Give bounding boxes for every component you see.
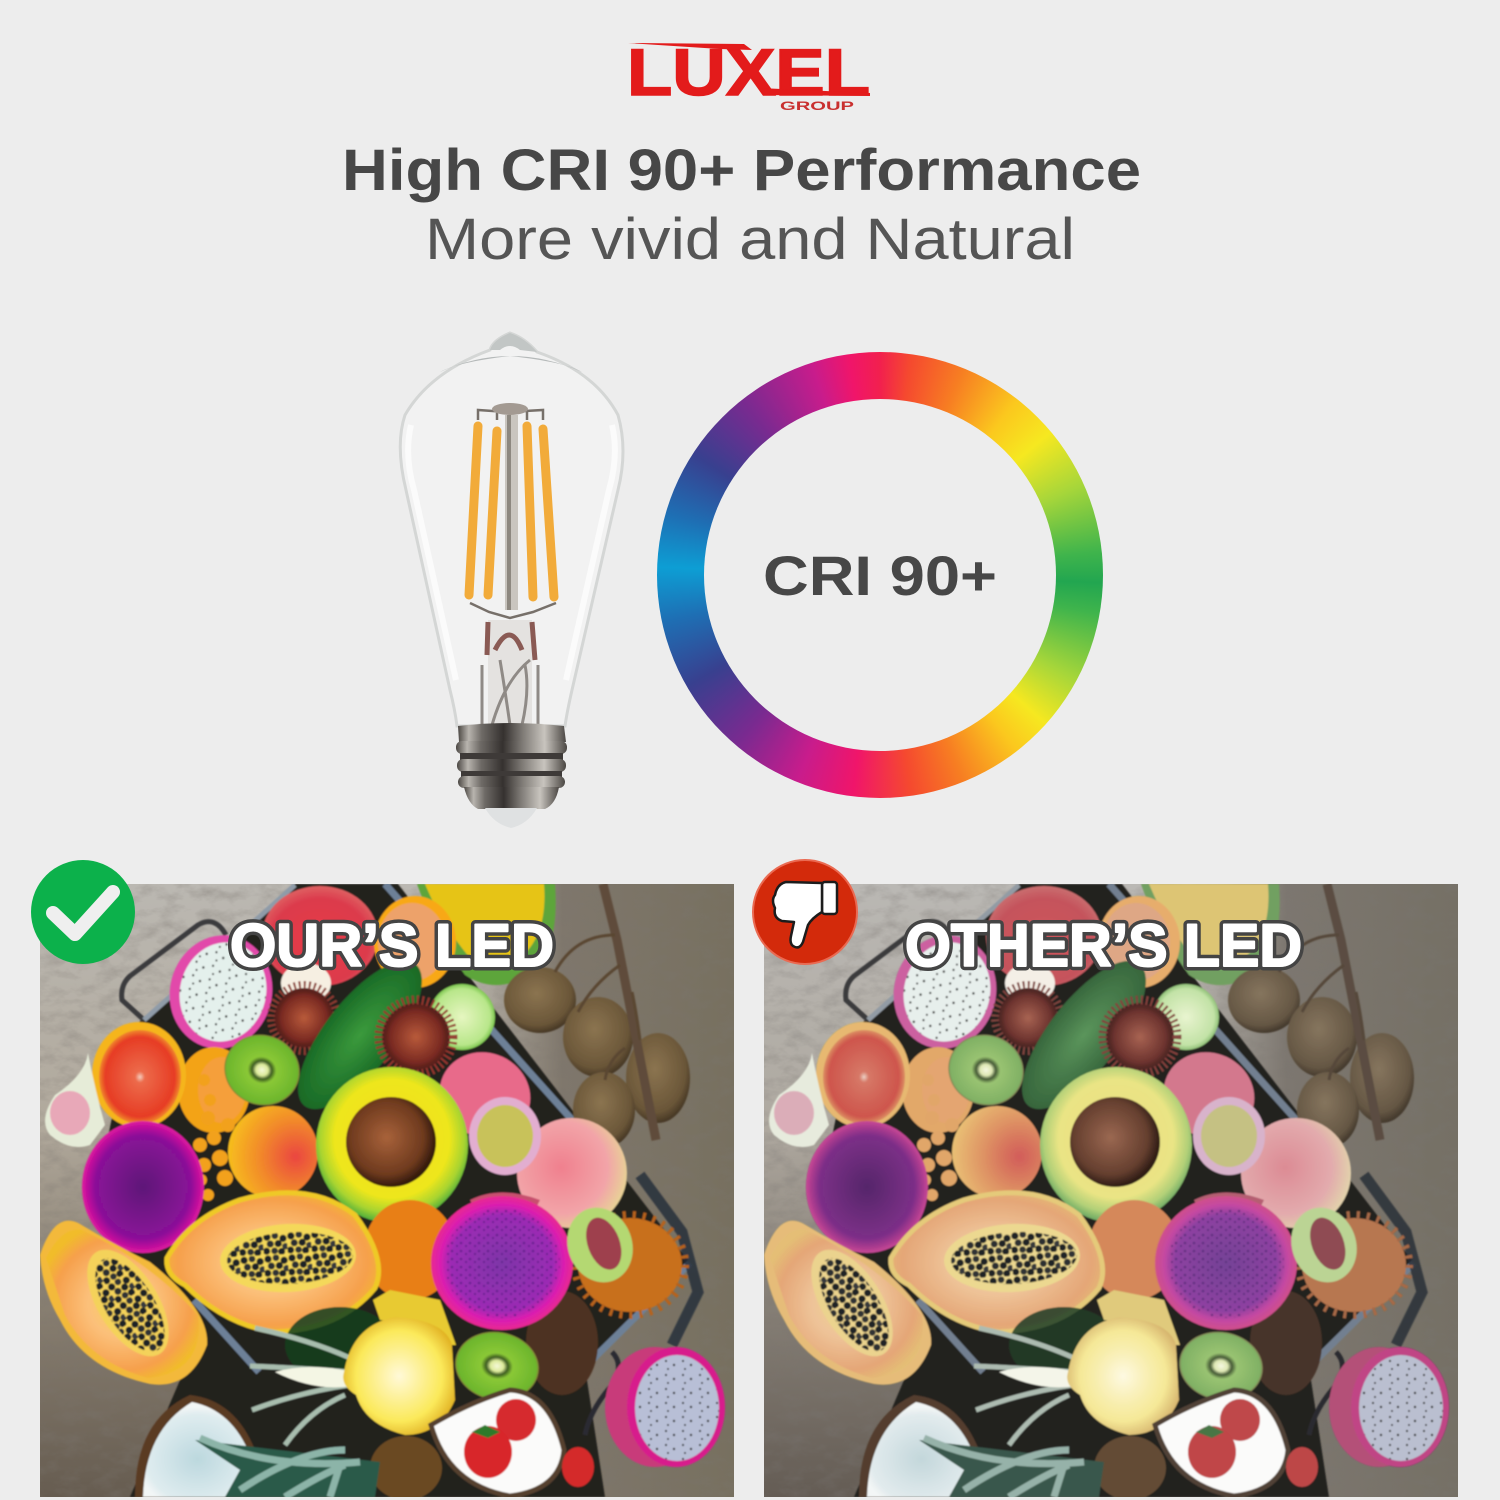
label: our's LED: OUR’S LED (230, 912, 554, 979)
icon: red thumbs down (753, 860, 857, 964)
label: other's LED: OTHER’S LED (905, 912, 1302, 979)
icon: green check (31, 860, 135, 964)
label: other's LED: OTHER’S LED (905, 912, 1302, 979)
label: our's LED: OUR’S LED (230, 912, 554, 979)
LED filament bulb (400, 333, 623, 828)
panel: other LED photo (764, 884, 1458, 1500)
panel: our LED photo (40, 884, 734, 1500)
brand logo: LUXEL (627, 35, 870, 109)
CRI label: CRI 90+ (763, 544, 997, 607)
brand logo: GROUP (780, 99, 854, 113)
heading: High CRI 90+ Performance (342, 138, 1141, 203)
CRI colour ring (657, 352, 1103, 798)
subheading: More vivid and Natural (425, 207, 1075, 272)
